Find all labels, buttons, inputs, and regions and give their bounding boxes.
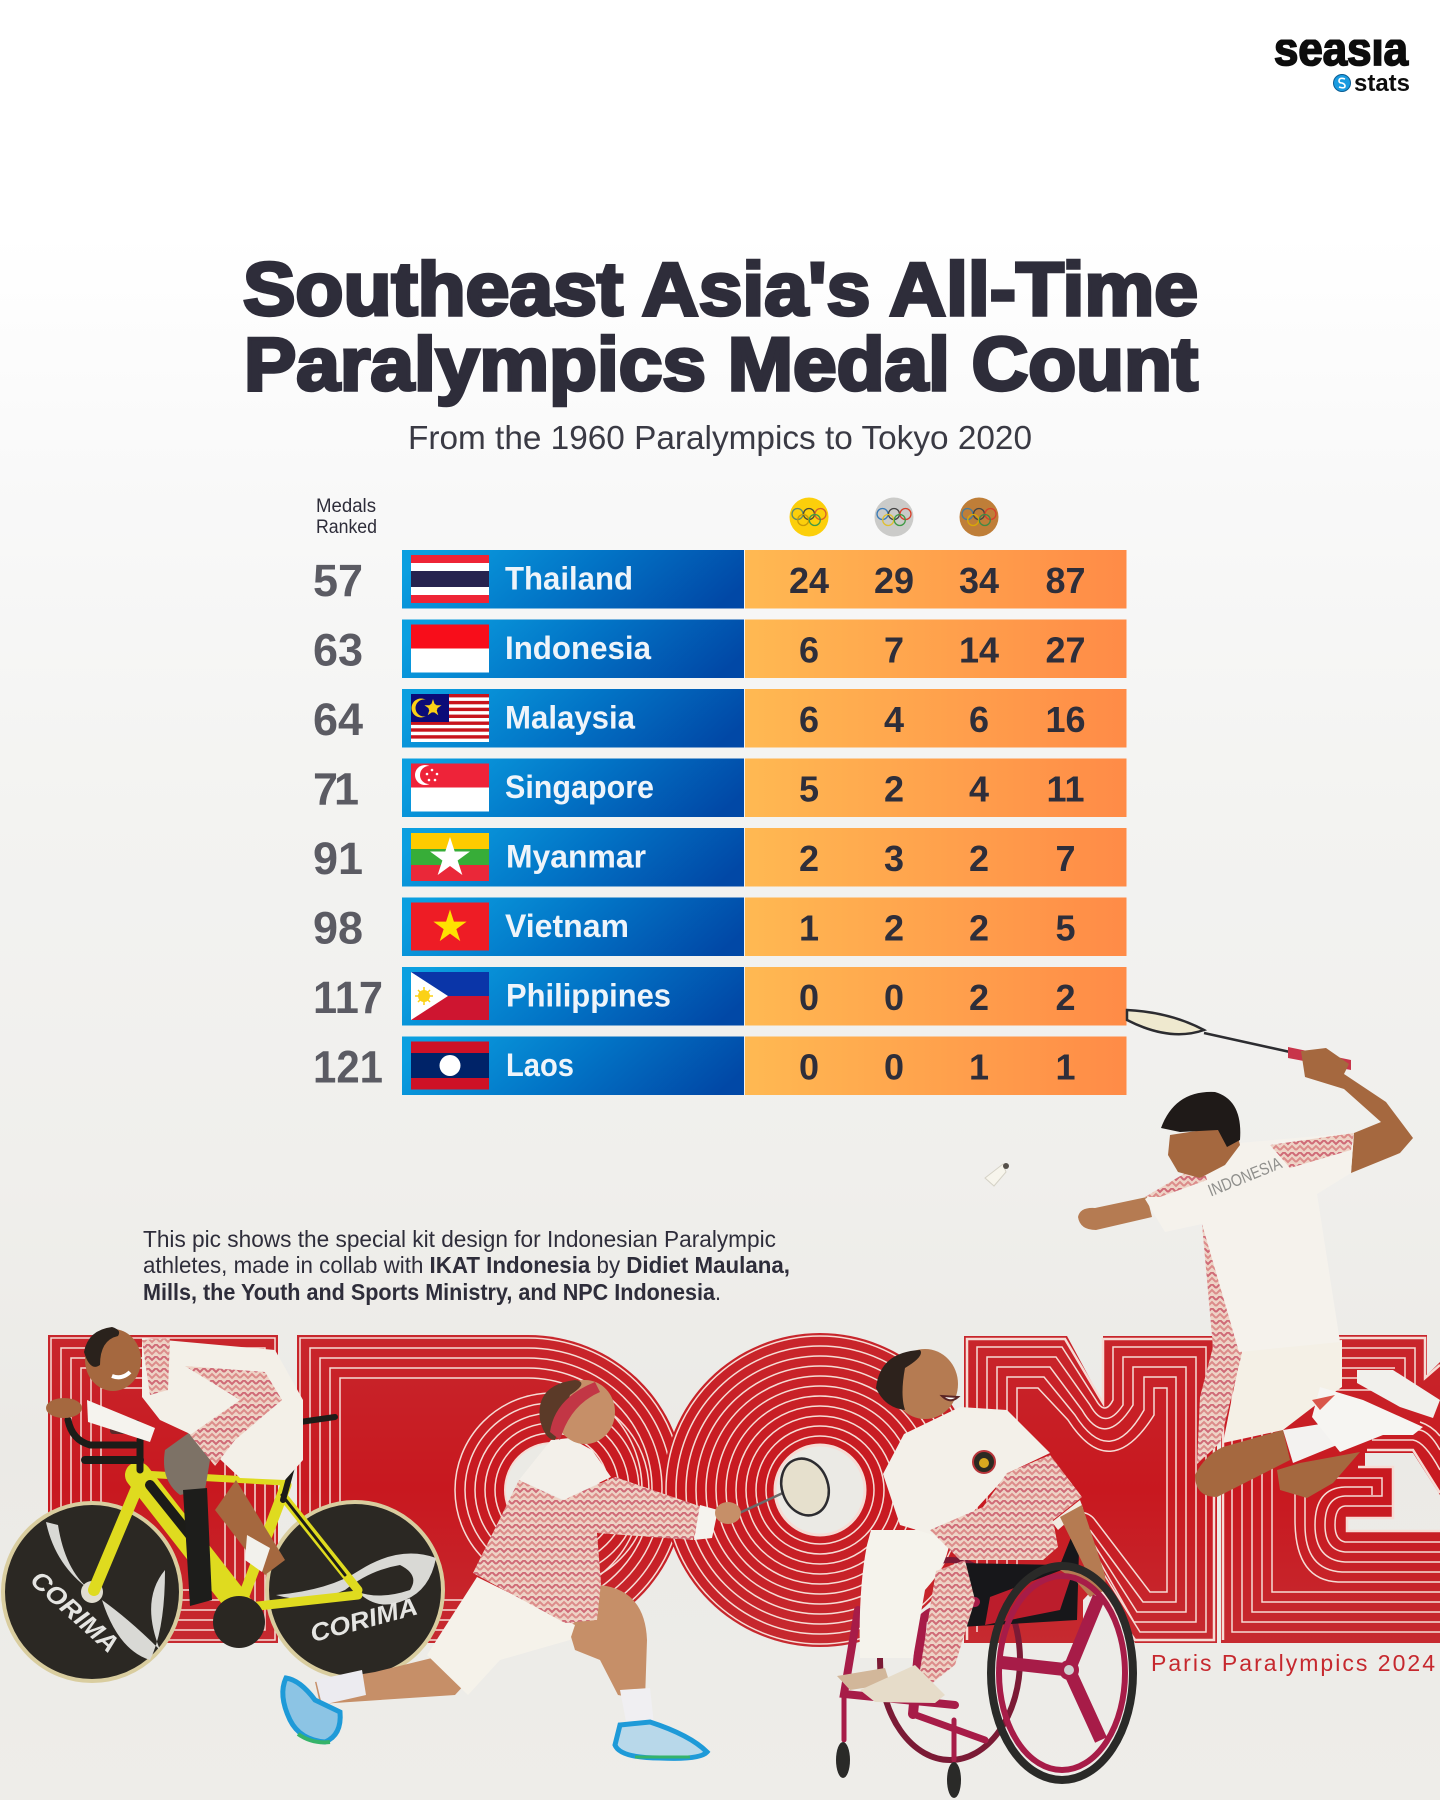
icon: shuttlecock xyxy=(985,1163,1009,1186)
medal bar xyxy=(745,620,1126,678)
medal numbers: 0 xyxy=(799,977,819,1018)
medal numbers: 6 xyxy=(799,699,819,740)
country name: Myanmar xyxy=(506,838,646,874)
medal numbers: 4 xyxy=(969,768,989,810)
athlete: cyclist on bike xyxy=(3,1327,443,1681)
flag: Philippines xyxy=(411,972,489,1020)
country bar xyxy=(402,620,744,678)
country bar xyxy=(402,758,744,817)
medal bar xyxy=(745,898,1126,956)
country name: Indonesia xyxy=(505,630,651,666)
medal bar xyxy=(745,1036,1126,1095)
table header: medals ranked: Medals xyxy=(316,496,376,517)
letter O xyxy=(663,1333,977,1647)
text block: kit design note: This pic shows the special kit design for Indonesian Paralympic xyxy=(143,1226,776,1252)
medal numbers: 29 xyxy=(874,560,914,601)
flag: Myanmar xyxy=(411,833,489,881)
racket xyxy=(735,1452,837,1522)
country bar xyxy=(402,828,744,886)
medal numbers xyxy=(799,1046,1076,1088)
medal numbers: 0 xyxy=(799,1046,819,1088)
legs xyxy=(1195,1422,1360,1498)
medal numbers: 2 xyxy=(884,768,904,810)
logo: seasia stats: seasia xyxy=(1274,22,1409,75)
shirt: INDONESIA xyxy=(1205,1153,1285,1200)
country name: Vietnam xyxy=(505,908,629,944)
medal numbers: 11 xyxy=(1046,768,1085,810)
pattern side panel xyxy=(1197,1224,1242,1464)
medal numbers: 16 xyxy=(1045,699,1086,740)
medal bar xyxy=(745,828,1126,886)
raised arm xyxy=(1301,1048,1413,1173)
medal numbers xyxy=(799,768,1085,810)
medal numbers: 2 xyxy=(884,908,904,948)
athlete: jumping badminton player xyxy=(1078,1010,1440,1498)
country name: Laos xyxy=(506,1047,574,1083)
subtitle: From the 1960 Paralympics to Tokyo 2020 xyxy=(408,419,1032,456)
head xyxy=(876,1349,958,1419)
table row: Laos xyxy=(313,1036,1126,1095)
title: Paralympics Medal Count xyxy=(244,322,1198,406)
rank: 121 xyxy=(313,1042,383,1092)
title: Southeast Asia's All-Time xyxy=(243,247,1198,331)
table row: Myanmar xyxy=(313,828,1126,886)
medal numbers: 6 xyxy=(799,630,819,670)
chair frame xyxy=(844,1602,985,1760)
arm xyxy=(1060,1505,1106,1597)
table row: Philippines xyxy=(313,967,1126,1026)
medal numbers: 14 xyxy=(959,630,999,670)
medal bar xyxy=(745,967,1126,1026)
icon: gold medal xyxy=(790,498,828,536)
flag: Laos xyxy=(411,1042,489,1090)
icon: bronze medal xyxy=(960,498,998,536)
rank: 64 xyxy=(313,694,363,745)
table row: Singapore xyxy=(313,758,1126,817)
athlete: wheelchair player xyxy=(836,1349,1133,1798)
medal numbers: 3 xyxy=(884,838,904,879)
medal numbers: 2 xyxy=(969,908,989,948)
medal numbers: 4 xyxy=(884,699,904,740)
rear disc wheel xyxy=(267,1502,443,1678)
rank: 117 xyxy=(313,972,383,1023)
shorts xyxy=(1223,1340,1342,1443)
letter N xyxy=(964,1336,1217,1643)
logo: seasia stats xyxy=(1270,20,1415,97)
text block: kit design note xyxy=(143,1226,790,1305)
shirt xyxy=(1145,1133,1354,1352)
table row: Vietnam xyxy=(313,898,1126,956)
patterned jacket xyxy=(473,1438,741,1623)
flag: Singapore xyxy=(411,764,489,812)
athlete: lunging badminton player xyxy=(283,1380,837,1758)
medal numbers: 24 xyxy=(789,560,829,601)
flag: Vietnam xyxy=(411,902,489,950)
medal numbers: 5 xyxy=(799,768,819,810)
flag: Thailand xyxy=(411,555,489,603)
rider body xyxy=(87,1338,303,1480)
medal numbers: 0 xyxy=(884,1046,904,1088)
medal numbers: 0 xyxy=(884,977,904,1018)
racket xyxy=(1127,1010,1351,1070)
jacket xyxy=(883,1407,1083,1560)
table header: medals ranked: Ranked xyxy=(316,517,377,538)
table row: Malaysia xyxy=(313,689,1126,748)
logo: seasia stats: stats xyxy=(1354,70,1410,97)
text block: kit design note: Mills, the Youth and Sports Ministry, and NPC Indonesia. xyxy=(143,1279,721,1305)
medal numbers: 2 xyxy=(969,977,989,1018)
country bar xyxy=(402,689,744,748)
rank: 63 xyxy=(313,624,363,676)
medal bar xyxy=(745,689,1126,748)
medal numbers xyxy=(799,977,1076,1018)
head xyxy=(1161,1092,1240,1178)
rank: 71 xyxy=(313,764,359,814)
front disc wheel xyxy=(3,1503,181,1681)
flag: Malaysia xyxy=(411,694,489,742)
main wheel xyxy=(991,1566,1133,1780)
bike frame xyxy=(68,1417,358,1648)
medal bar xyxy=(745,758,1126,817)
table row: Thailand xyxy=(313,550,1126,608)
country bar xyxy=(402,550,744,608)
medal numbers: 2 xyxy=(1055,977,1076,1018)
table header: medals ranked xyxy=(316,496,377,538)
head xyxy=(539,1380,615,1444)
medal numbers: 1 xyxy=(969,1046,989,1088)
letter I xyxy=(48,1335,278,1643)
medal numbers: 1 xyxy=(799,908,819,948)
letter D xyxy=(297,1335,685,1643)
medal numbers xyxy=(799,838,1076,879)
medal numbers: 87 xyxy=(1045,560,1086,601)
medal numbers: 34 xyxy=(959,560,999,601)
rider head and hand xyxy=(46,1327,141,1418)
wheelchair rear wheel behind xyxy=(880,1560,1020,1760)
country bar xyxy=(402,1036,744,1095)
background artwork: red INDONESIA lettering xyxy=(48,1333,1440,1647)
rank: 57 xyxy=(313,555,363,606)
rear disc wheel: CORIMA xyxy=(307,1593,421,1648)
country name: Singapore xyxy=(505,769,654,805)
legs xyxy=(315,1585,654,1732)
medal numbers xyxy=(789,560,1086,601)
letter E xyxy=(1221,1335,1440,1643)
medal numbers: 5 xyxy=(1055,908,1076,948)
country name: Philippines xyxy=(506,978,671,1014)
medal numbers: 7 xyxy=(1055,838,1076,879)
medal numbers: 2 xyxy=(969,838,989,879)
medal numbers xyxy=(799,908,1076,948)
country name: Thailand xyxy=(505,560,633,596)
front disc wheel: CORIMA xyxy=(25,1566,124,1659)
rank: 91 xyxy=(313,833,363,884)
flag: Indonesia xyxy=(411,624,489,672)
country bar xyxy=(402,967,744,1026)
text block: kit design note: athletes, made in collab with IKAT Indonesia by Didiet Maulana, xyxy=(143,1252,790,1278)
medal numbers: 1 xyxy=(1055,1046,1076,1088)
medal bar xyxy=(745,550,1126,608)
shoes xyxy=(283,1678,707,1758)
rank: 98 xyxy=(313,902,363,954)
icon: silver medal xyxy=(874,498,914,536)
medal numbers xyxy=(799,630,1086,670)
medal numbers: 2 xyxy=(799,838,819,879)
title xyxy=(243,247,1198,406)
rider legs xyxy=(164,1432,285,1606)
country name: Malaysia xyxy=(505,700,635,736)
legs and pants xyxy=(837,1530,975,1703)
casters xyxy=(836,1742,961,1798)
medal numbers: 27 xyxy=(1045,630,1086,670)
shoes xyxy=(1312,1370,1440,1452)
medal numbers: 6 xyxy=(969,699,989,740)
seat xyxy=(957,1515,1080,1627)
medal numbers xyxy=(799,699,1086,740)
country bar xyxy=(402,898,744,956)
stump arm xyxy=(1078,1197,1152,1230)
shorts xyxy=(427,1577,575,1695)
medal numbers: 7 xyxy=(884,630,904,670)
label: Paris Paralympics 2024: Paris Paralympics 2024 xyxy=(1151,1650,1435,1676)
table row: Indonesia xyxy=(313,620,1126,678)
